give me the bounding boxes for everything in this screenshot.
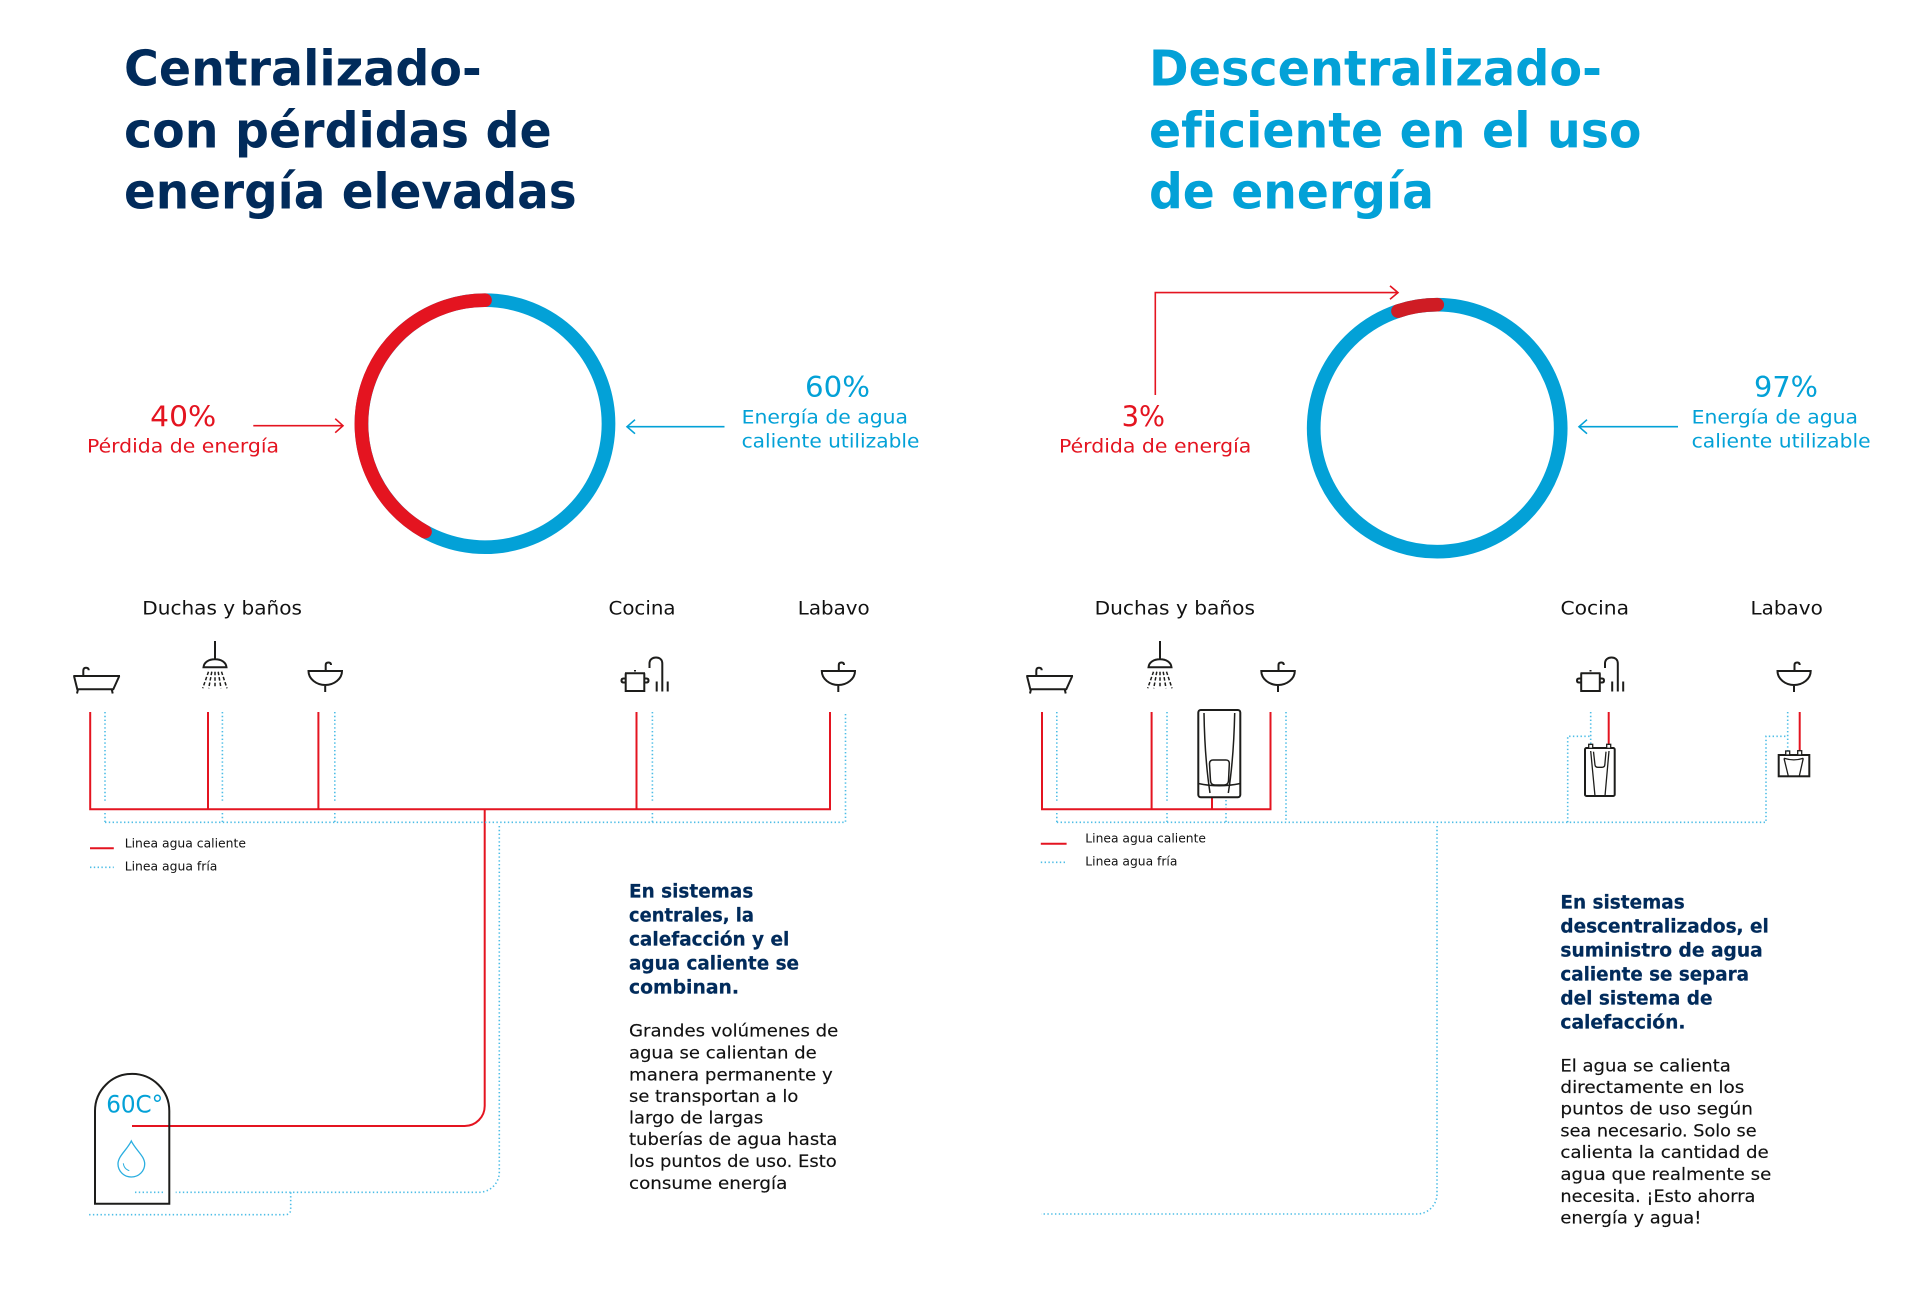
callout: 60% usable hot water energy: Energía de agua	[742, 407, 908, 428]
section labels: Duchas y baños	[1095, 598, 1255, 620]
text block: decentralized systems: El agua se calienta	[1560, 1057, 1731, 1077]
callout: 40% energy loss	[87, 401, 279, 458]
section labels: Cocina	[608, 598, 676, 620]
callout: 60% usable hot water energy	[742, 371, 919, 453]
icon: pot and kitchen tap	[1577, 658, 1623, 692]
panel: centralizado	[73, 41, 919, 1215]
heading: descentralizado: Descentralizado-	[1149, 41, 1602, 98]
cold water pipes	[1041, 712, 1788, 1214]
legend: Linea agua fría	[1085, 854, 1177, 869]
text block: central systems: se transportan a lo	[629, 1087, 798, 1107]
text block: central systems: centrales, la	[629, 905, 754, 926]
icon: sink	[1261, 662, 1295, 692]
icon: pot and kitchen tap	[622, 658, 668, 692]
callout: 3% energy loss: Pérdida de energía	[1059, 437, 1251, 458]
hot water pipes	[1042, 712, 1800, 809]
callout: 60% usable hot water energy: 60%	[805, 371, 870, 404]
text block: decentralized systems: descentralizados, el	[1560, 916, 1769, 937]
section labels: Labavo	[1750, 598, 1823, 620]
icon: bathtub	[1026, 668, 1073, 694]
text block: decentralized systems: energía y agua!	[1560, 1208, 1701, 1228]
heading: centralizado: con pérdidas de	[124, 102, 552, 159]
callout: 40% energy loss: 40%	[150, 401, 216, 434]
icon: mini heater	[1779, 751, 1809, 776]
icon: large heater	[1198, 710, 1240, 797]
legend: Linea agua fría	[125, 859, 217, 874]
heading: centralizado: Centralizado-	[124, 41, 482, 98]
panel: descentralizado	[1026, 41, 1871, 1229]
text block: central systems	[629, 881, 838, 1194]
text block: decentralized systems	[1560, 892, 1771, 1228]
text block: central systems: los puntos de uso. Esto	[629, 1152, 837, 1172]
arrow: to red arc	[253, 419, 343, 433]
text block: central systems: tuberías de agua hasta	[629, 1130, 837, 1150]
callout: 97% usable hot water energy: caliente utilizable	[1692, 432, 1871, 453]
hot water pipes	[90, 712, 830, 1126]
text block: central systems: Grandes volúmenes de	[629, 1022, 838, 1042]
text block: central systems: combinan.	[629, 977, 739, 998]
text block: decentralized systems: puntos de uso según	[1560, 1100, 1753, 1120]
icon: washbasin	[822, 662, 855, 692]
callout: 40% energy loss: Pérdida de energía	[87, 437, 279, 458]
section labels: Duchas y baños	[142, 598, 302, 620]
icon: shower	[1148, 641, 1172, 688]
text block: decentralized systems: directamente en los	[1560, 1078, 1744, 1098]
callout: 60% usable hot water energy: caliente utilizable	[742, 432, 919, 453]
text block: central systems: agua se calientan de	[629, 1043, 817, 1063]
section labels: Labavo	[798, 598, 870, 620]
section labels	[142, 598, 870, 620]
icon: washbasin	[1778, 662, 1811, 692]
callout: 97% usable hot water energy	[1692, 371, 1871, 453]
text block: decentralized systems: necesita. ¡Esto ahorra	[1560, 1187, 1755, 1207]
icon: small heater	[1585, 744, 1615, 796]
heading: centralizado	[124, 41, 577, 220]
callout: 97% usable hot water energy: Energía de agua	[1692, 407, 1858, 428]
heading: descentralizado: de energía	[1149, 164, 1434, 220]
legend: Linea agua caliente	[125, 836, 246, 851]
heading: descentralizado	[1149, 41, 1642, 220]
section labels	[1095, 598, 1823, 620]
text block: central systems: calefacción y el	[629, 930, 789, 951]
section labels: Cocina	[1560, 598, 1629, 620]
donut chart: 40% loss, 60% usable	[361, 300, 608, 547]
callout: 3% energy loss: 3%	[1122, 401, 1165, 434]
arrow: to red arc	[1155, 286, 1398, 395]
text block: decentralized systems: agua que realmente se	[1560, 1165, 1771, 1185]
heading: centralizado: energía elevadas	[124, 164, 577, 220]
text block: central systems: manera permanente y	[629, 1065, 833, 1085]
donut chart: 3% loss, 97% usable	[1314, 305, 1561, 552]
legend: Linea agua caliente	[1085, 831, 1206, 846]
text block: decentralized systems: caliente se separa	[1560, 964, 1749, 985]
text block: decentralized systems: del sistema de	[1560, 988, 1712, 1009]
text block: decentralized systems: sea necesario. Solo se	[1560, 1121, 1757, 1141]
arrow: to blue arc	[627, 420, 724, 434]
text block: decentralized systems: En sistemas	[1560, 892, 1685, 913]
callout: 97% usable hot water energy: 97%	[1754, 371, 1818, 404]
text block: central systems: En sistemas	[629, 881, 753, 902]
cold water pipes	[89, 712, 846, 1215]
text block: decentralized systems: calefacción.	[1560, 1012, 1686, 1033]
text block: decentralized systems: suministro de agua	[1560, 940, 1763, 961]
text block: central systems: consume energía	[629, 1174, 787, 1194]
text block: central systems: largo de largas	[629, 1109, 763, 1129]
legend	[90, 836, 246, 874]
icon: hot water tank 60C	[95, 1074, 169, 1204]
text block: decentralized systems: calienta la cantidad de	[1560, 1143, 1769, 1163]
icon: sink	[308, 662, 342, 692]
callout: 3% energy loss	[1059, 401, 1251, 458]
icon: shower	[203, 641, 227, 688]
icon: hot water tank 60C: 60C°	[106, 1090, 163, 1118]
legend	[1041, 831, 1206, 869]
arrow: to blue arc	[1579, 420, 1678, 434]
text block: central systems: agua caliente se	[629, 954, 799, 975]
heading: descentralizado: eficiente en el uso	[1149, 102, 1642, 159]
icon: bathtub	[73, 668, 120, 694]
